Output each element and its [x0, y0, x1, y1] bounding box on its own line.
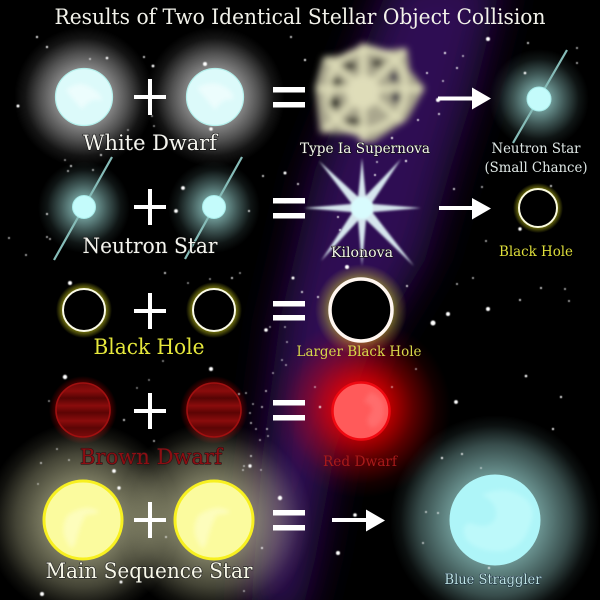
icon: main sequence star right — [175, 481, 253, 559]
icon: neutron star right — [185, 157, 242, 259]
arrow — [332, 510, 385, 532]
label: type Ia supernova: Type Ia Supernova — [300, 141, 430, 157]
plus — [134, 293, 166, 329]
icon: neutron star left — [54, 157, 112, 260]
label: kilonova: Kilonova — [331, 245, 393, 261]
label: neutron star: Neutron Star — [82, 234, 218, 258]
label: black hole: Black Hole — [94, 335, 204, 359]
icon: blue straggler — [450, 474, 540, 566]
label: larger black hole: Larger Black Hole — [296, 344, 422, 360]
plus — [134, 189, 166, 225]
icon: black hole result — [519, 189, 557, 227]
row 5: main sequence star — [44, 474, 542, 588]
title: Results of Two Identical Stellar Object Collision — [54, 5, 546, 29]
icon: red dwarf — [332, 382, 390, 440]
icon: kilonova — [304, 158, 421, 266]
label: brown dwarf: Brown Dwarf — [80, 445, 224, 469]
icon: main sequence star left — [44, 481, 122, 559]
label: black hole: Black Hole — [499, 244, 573, 260]
plus — [134, 79, 166, 115]
arrow — [438, 88, 491, 110]
label: red dwarf: Red Dwarf — [323, 454, 399, 470]
row 4: brown dwarf — [56, 382, 399, 470]
icon: type Ia supernova — [315, 43, 425, 143]
plus — [134, 502, 166, 538]
icon: white dwarf left — [56, 68, 112, 126]
label: neutron star small chance: Neutron Star — [492, 141, 581, 157]
row 3: black hole — [63, 279, 422, 360]
icon: white dwarf right — [186, 68, 244, 126]
icon: neutron star result — [513, 50, 567, 143]
equals — [273, 198, 305, 218]
plus — [134, 393, 166, 429]
icon: brown dwarf left — [56, 383, 110, 437]
icon: brown dwarf right — [187, 383, 241, 437]
nebula: purple band — [250, 0, 505, 600]
label: neutron star small chance: (Small Chance) — [484, 160, 588, 176]
icon: larger black hole — [330, 279, 392, 341]
label: neutron star small chance — [484, 141, 588, 176]
equals — [273, 87, 305, 108]
arrow — [439, 198, 491, 220]
label: white dwarf: White Dwarf — [83, 131, 219, 155]
equals — [273, 301, 305, 320]
equals — [273, 400, 305, 420]
icon: black hole left — [63, 289, 105, 331]
row 1: white dwarf — [56, 43, 588, 176]
label: blue straggler: Blue Straggler — [444, 572, 542, 588]
icon: black hole right — [193, 289, 235, 331]
equals — [273, 510, 305, 530]
label: main sequence star: Main Sequence Star — [46, 559, 253, 583]
row 2: neutron star — [54, 157, 573, 266]
